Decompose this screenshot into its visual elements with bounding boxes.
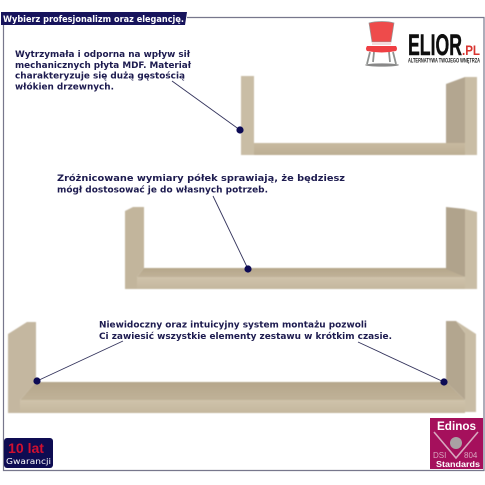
badge: Edinos standards — [430, 418, 483, 469]
logo: Elior — [365, 22, 480, 67]
badge: 10 years warranty: Gwarancji — [6, 457, 51, 466]
text: shelf sizes: Zróżnicowane wymiary półek sprawiają, że będziesz — [57, 173, 345, 184]
text: material description: włókien drzewnych. — [15, 82, 114, 92]
callout: pointer to left shelf 3 corner — [33, 341, 123, 385]
shelf 3 — [8, 321, 476, 413]
callout: pointer to shelf 1 — [172, 81, 244, 134]
text: mounting system — [99, 320, 392, 342]
badge: 10 years warranty — [4, 438, 53, 468]
text: mounting system: Ci zawiesić wszystkie elementy zestawu w krótkim czasie. — [99, 331, 392, 342]
text: material description: charakteryzuje się dużą gęstością — [15, 70, 185, 82]
icon: red chair — [365, 22, 399, 67]
badge: Edinos standards: Edinos — [437, 421, 476, 433]
shelf 2 — [125, 207, 477, 289]
badge: Edinos standards: Standards — [436, 460, 481, 469]
shelf 1 — [241, 76, 477, 155]
text: shelf sizes — [57, 173, 345, 196]
title banner: Wybierz profesjonalizm oraz elegancję. — [3, 15, 184, 25]
callout: pointer to shelf 2 — [213, 196, 252, 273]
text: material description: Wytrzymała i odporna na wpływ sił — [15, 50, 191, 60]
text: material description: mechanicznych płyta MDF. Materiał — [15, 61, 192, 71]
badge: Edinos standards: 804 — [464, 451, 478, 460]
text: shelf sizes: mógł dostosować je do własnych potrzeb. — [57, 184, 268, 196]
logo: Elior: .PL — [462, 42, 480, 58]
text: mounting system: Niewidoczny oraz intuicyjny system montażu pozwoli — [99, 320, 367, 330]
callout: pointer to right shelf 3 corner — [358, 342, 448, 386]
text: material description — [15, 50, 192, 92]
badge: Edinos standards: DSI — [433, 451, 446, 460]
badge: 10 years warranty: 10 lat — [8, 440, 44, 456]
